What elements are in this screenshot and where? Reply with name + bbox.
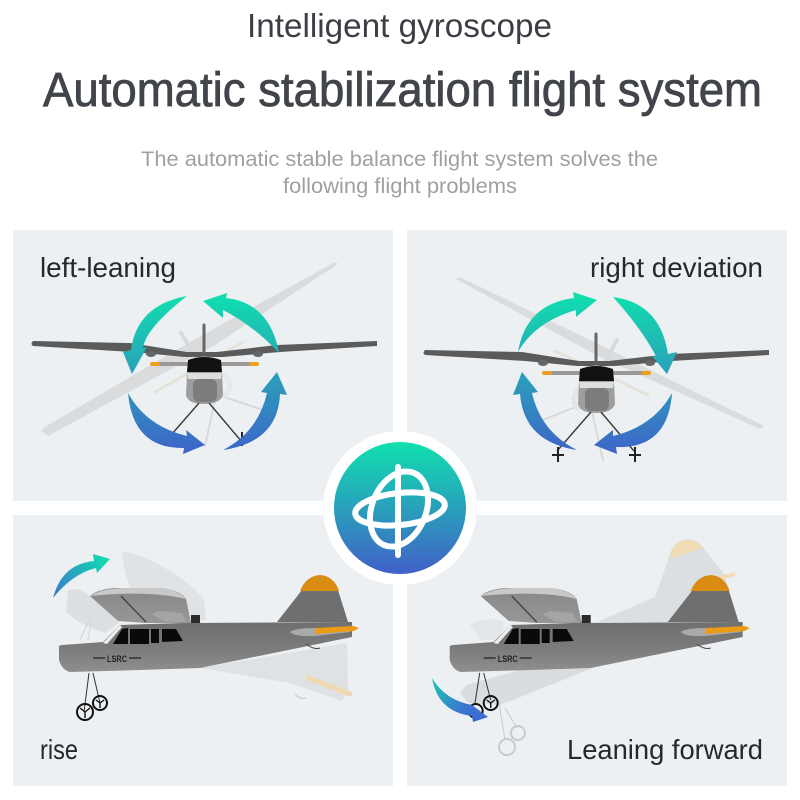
icon: gyroscope — [354, 463, 446, 555]
panel: rise — [13, 515, 393, 786]
panel background — [407, 515, 787, 786]
fuselage logo: LSRC — [107, 654, 127, 664]
label: left-leaning: left-leaning — [40, 252, 176, 283]
label: leaning forward: Leaning forward — [567, 734, 763, 765]
subtitle line 2: following flight problems — [283, 175, 517, 198]
main title: Automatic stabilization flight system — [43, 64, 762, 117]
fuselage logo: LSRC — [498, 654, 518, 664]
ghost plane, nose down — [460, 540, 735, 755]
subtitle line 1: The automatic stable balance flight system solves the — [141, 148, 658, 171]
ghost plane, nose up — [66, 552, 350, 701]
label: right deviation: right deviation — [590, 252, 763, 283]
rotation arrows — [513, 292, 677, 454]
header: intelligent gyroscope: Intelligent gyroscope — [247, 7, 552, 44]
arrow: leaning forward — [432, 678, 488, 722]
panel background — [407, 230, 787, 501]
plane front view — [424, 334, 769, 462]
label: rise: rise — [40, 734, 78, 765]
badge gradient disc — [334, 442, 466, 574]
plane side view — [450, 575, 750, 718]
arrow: rise — [53, 554, 110, 598]
panel: leaning forward — [407, 515, 787, 786]
rotation arrows — [123, 293, 287, 454]
badge white ring — [323, 431, 477, 585]
ghost plane, tilted — [41, 262, 338, 446]
panel: left-leaning — [13, 230, 393, 501]
panel background — [13, 515, 393, 786]
panel background — [13, 230, 393, 501]
plane front view — [32, 325, 377, 446]
panel: right deviation — [407, 230, 787, 501]
plane side view — [59, 575, 359, 720]
ghost plane, tilted — [456, 278, 764, 460]
central badge — [323, 431, 477, 585]
